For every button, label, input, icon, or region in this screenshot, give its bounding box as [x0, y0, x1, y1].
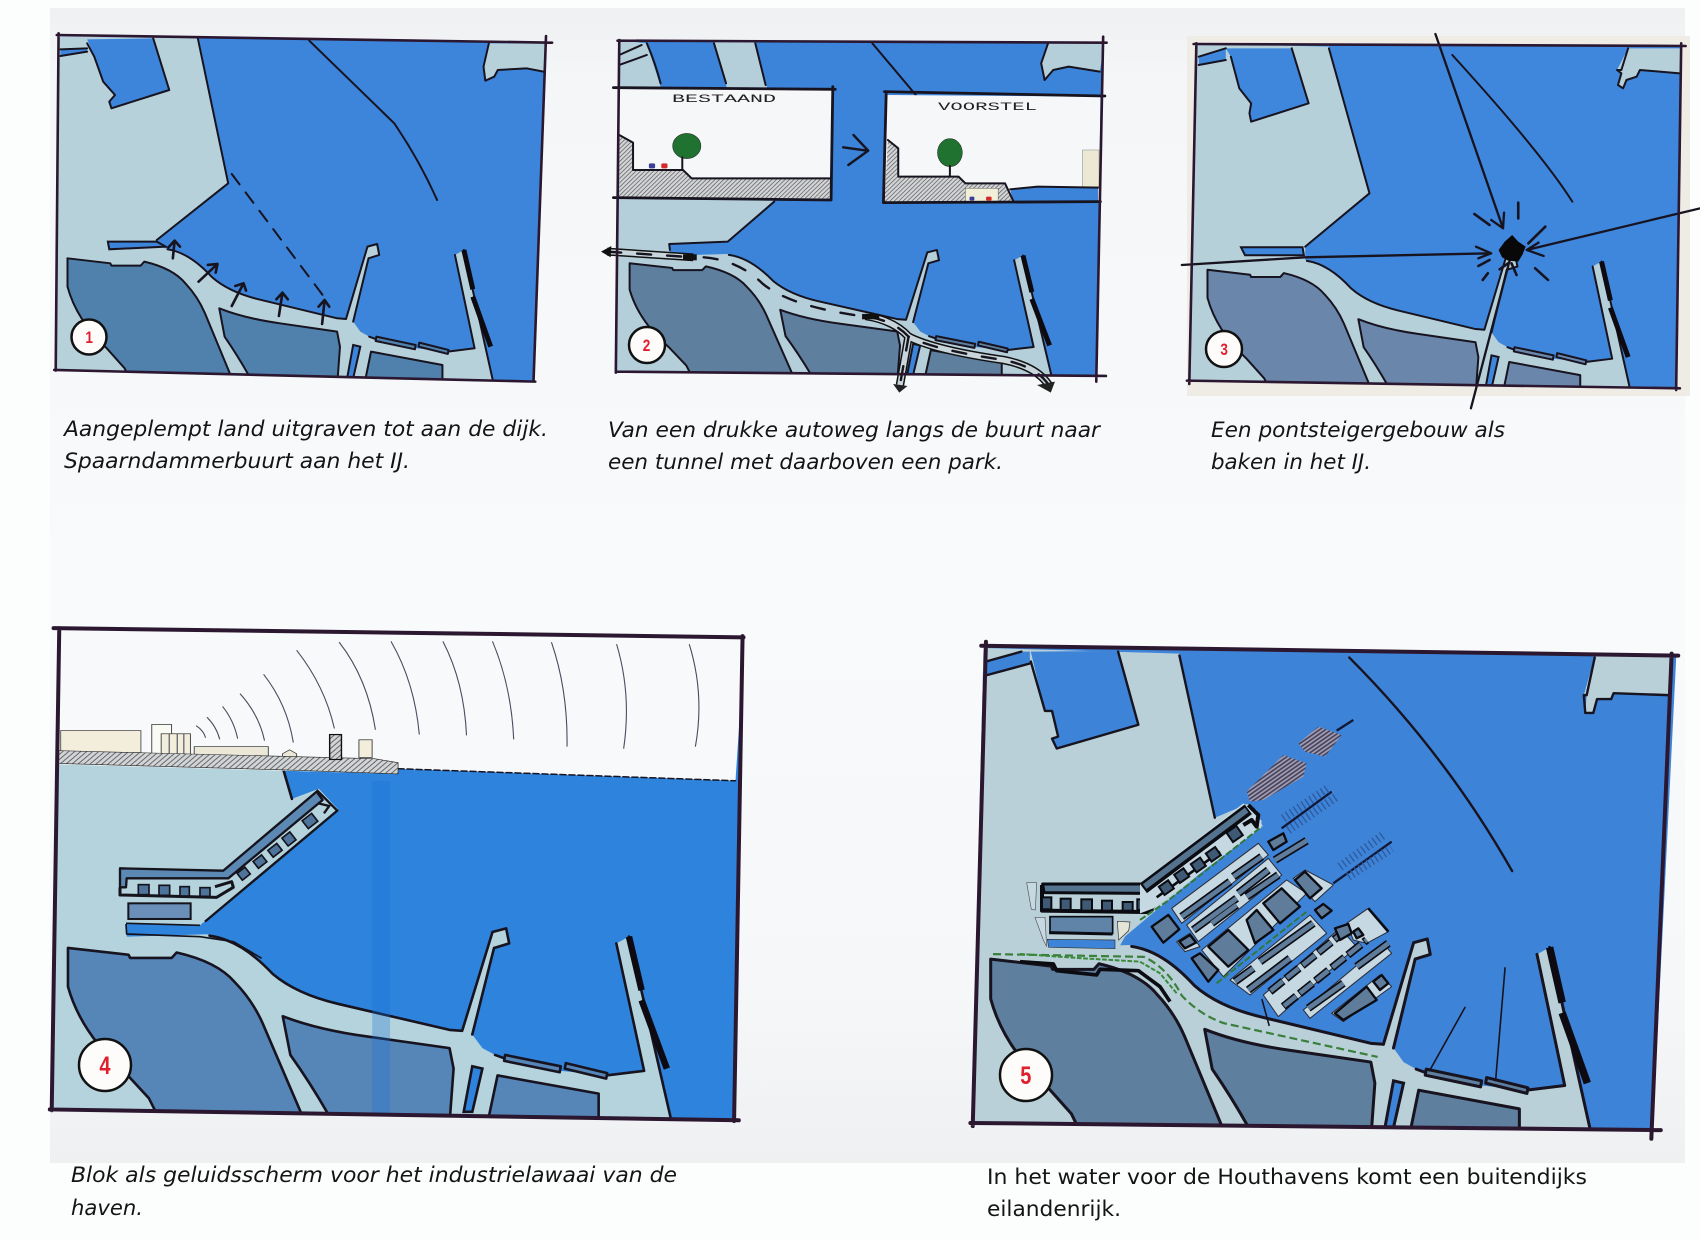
- caption 4: [71, 1163, 677, 1221]
- frame 4: [50, 628, 744, 1121]
- map 2: [601, 35, 1108, 393]
- panel 5: island realm: [968, 640, 1680, 1220]
- icon: cars: [649, 163, 667, 168]
- arrow between sections: [843, 135, 868, 165]
- section: voorstel: [883, 92, 1105, 203]
- number badge 5: 5: [1020, 1062, 1031, 1090]
- section label: bestaand: BESTAAND: [672, 94, 777, 106]
- panel 2: road to tunnel: [601, 35, 1108, 474]
- frame 2: [616, 37, 1107, 382]
- caption 2: een tunnel met daarboven een park.: [608, 450, 1003, 475]
- road with traffic arrows: [601, 246, 1055, 393]
- number badge 2: [629, 327, 665, 363]
- caption 4: Blok als geluidsscherm voor het industrielawaai van de: [71, 1163, 677, 1188]
- frame 5: [970, 642, 1678, 1139]
- L-shaped block, north wing: [1140, 803, 1263, 913]
- number badge 3: [1206, 331, 1242, 367]
- number badge 1: [72, 320, 106, 354]
- section: bestaand: [613, 87, 835, 200]
- caption 1: Spaarndammerbuurt aan het IJ.: [64, 449, 410, 474]
- caption 5: eilandenrijk.: [987, 1197, 1121, 1222]
- caption 1: [62, 417, 548, 474]
- panel 4: noise screen block: [48, 626, 746, 1216]
- folded paper stripe: [372, 1010, 390, 1113]
- icon: beacon star: [1474, 203, 1548, 280]
- industry skyline: [58, 725, 398, 774]
- caption 5: In het water voor de Houthavens komt een buitendijks: [987, 1165, 1587, 1190]
- green planting lines: [1140, 827, 1307, 983]
- caption 3: baken in het IJ.: [1211, 450, 1371, 475]
- map 1: [53, 32, 554, 383]
- caption 4: haven.: [71, 1196, 143, 1221]
- island square buildings: [1152, 833, 1388, 1020]
- icon: tree: [673, 133, 701, 170]
- number badge 2: 2: [643, 337, 650, 355]
- number badge 4: [79, 1039, 131, 1091]
- islands cluster: [1140, 720, 1392, 1022]
- caption 2: [608, 418, 1101, 475]
- frame 3: [1187, 43, 1686, 390]
- number badge 5: [1000, 1049, 1052, 1101]
- dike green planting: [993, 954, 1378, 1057]
- L-shaped block, west leg: [1020, 876, 1177, 1002]
- dashed excavation line: [232, 174, 326, 300]
- caption 2: Van een drukke autoweg langs de buurt naar: [608, 418, 1101, 443]
- map 5: [968, 640, 1680, 1141]
- lower jetties: [1262, 968, 1505, 1081]
- number badge 1: 1: [85, 329, 93, 347]
- icon: tree: [937, 139, 962, 177]
- panel 3: ferry building beacon: [1180, 32, 1700, 474]
- L-shaped noise block: [120, 790, 337, 958]
- marinas: [1247, 720, 1392, 883]
- caption 3: [1211, 418, 1505, 475]
- number badge 3: 3: [1220, 341, 1228, 359]
- caption 1: Aangeplempt land uitgraven tot aan de dijk.: [62, 417, 548, 442]
- number badge 4: 4: [99, 1052, 111, 1080]
- caption 5: [987, 1165, 1587, 1222]
- sound waves sky: [56, 629, 745, 781]
- map 4: [48, 626, 746, 1124]
- caption 3: Een pontsteigergebouw als: [1211, 418, 1505, 443]
- island pads: [1172, 843, 1392, 1022]
- map 3: [1180, 32, 1700, 410]
- frame 1: [54, 33, 552, 382]
- section label: voorstel: VOORSTEL: [938, 102, 1037, 114]
- panel 1: excavate reclaimed land: [53, 32, 554, 472]
- sight lines and arrows: [1182, 34, 1700, 408]
- island building strips: [1182, 841, 1388, 1008]
- excavation arrows: [169, 241, 329, 324]
